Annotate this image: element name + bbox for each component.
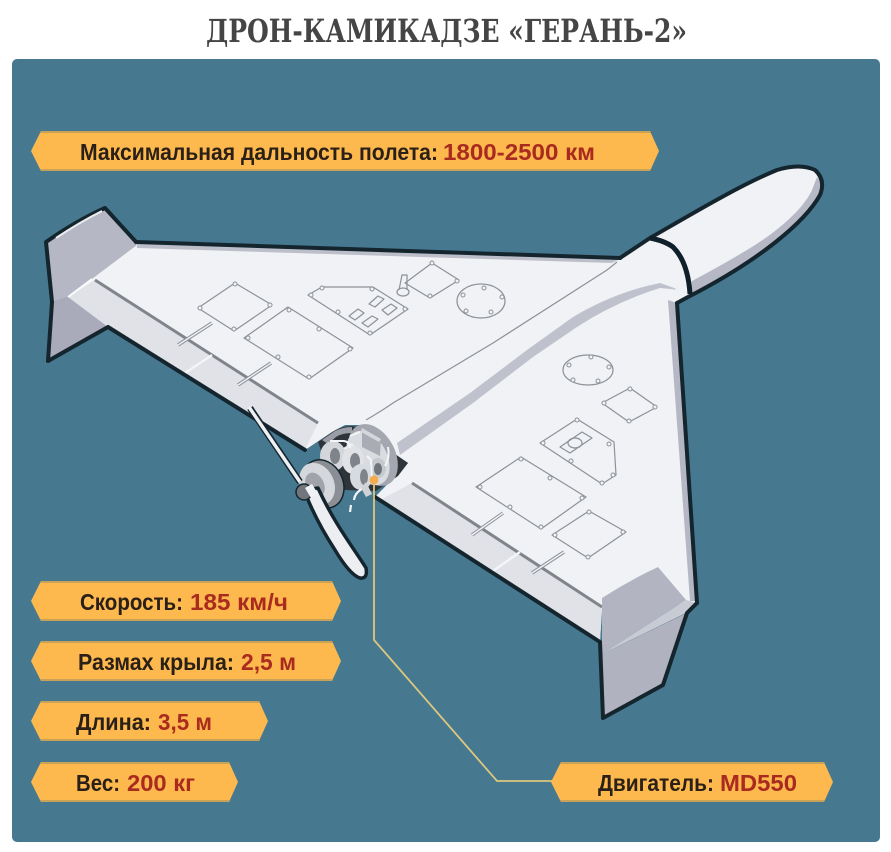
banner: length: 3,5 м: [158, 709, 212, 735]
drone illustration: [46, 166, 822, 718]
banner: speed: 185 км/ч: [190, 589, 288, 615]
banner: engine: MD550: [720, 770, 797, 796]
left wing hatches: [178, 261, 505, 385]
right fin: [600, 567, 697, 718]
banner: speed: Скорость:: [80, 589, 183, 615]
banner: weight: [31, 762, 238, 802]
banner: weight: Вес:: [76, 770, 120, 796]
wing and fuselage body: [68, 238, 697, 642]
left control surface: [68, 279, 318, 450]
left fin: [46, 208, 137, 361]
right wing hatches: [472, 355, 657, 573]
wing outline and shading: [108, 242, 697, 642]
banner: length: Длина:: [76, 709, 151, 735]
banner: max range: Максимальная дальность полета:: [80, 139, 438, 165]
banner: speed: [31, 581, 341, 621]
banner: engine: [551, 762, 833, 802]
banner: wingspan: Размах крыла:: [78, 649, 234, 675]
propeller: [249, 407, 366, 578]
banner: length: [31, 701, 268, 741]
banner: max range: 1800-2500 км: [443, 139, 595, 165]
leader line to engine: [370, 476, 552, 781]
banner: wingspan: [31, 641, 341, 681]
banner: max range: [31, 131, 659, 171]
title: ДРОН-КАМИКАДЗЕ «ГЕРАНЬ-2»: [206, 12, 687, 50]
banner: weight: 200 кг: [127, 770, 195, 796]
engine: [318, 416, 408, 512]
nose cone: [620, 166, 822, 303]
banner: wingspan: 2,5 м: [241, 649, 296, 675]
banner: engine: Двигатель:: [598, 770, 714, 796]
right control surface: [380, 483, 602, 642]
